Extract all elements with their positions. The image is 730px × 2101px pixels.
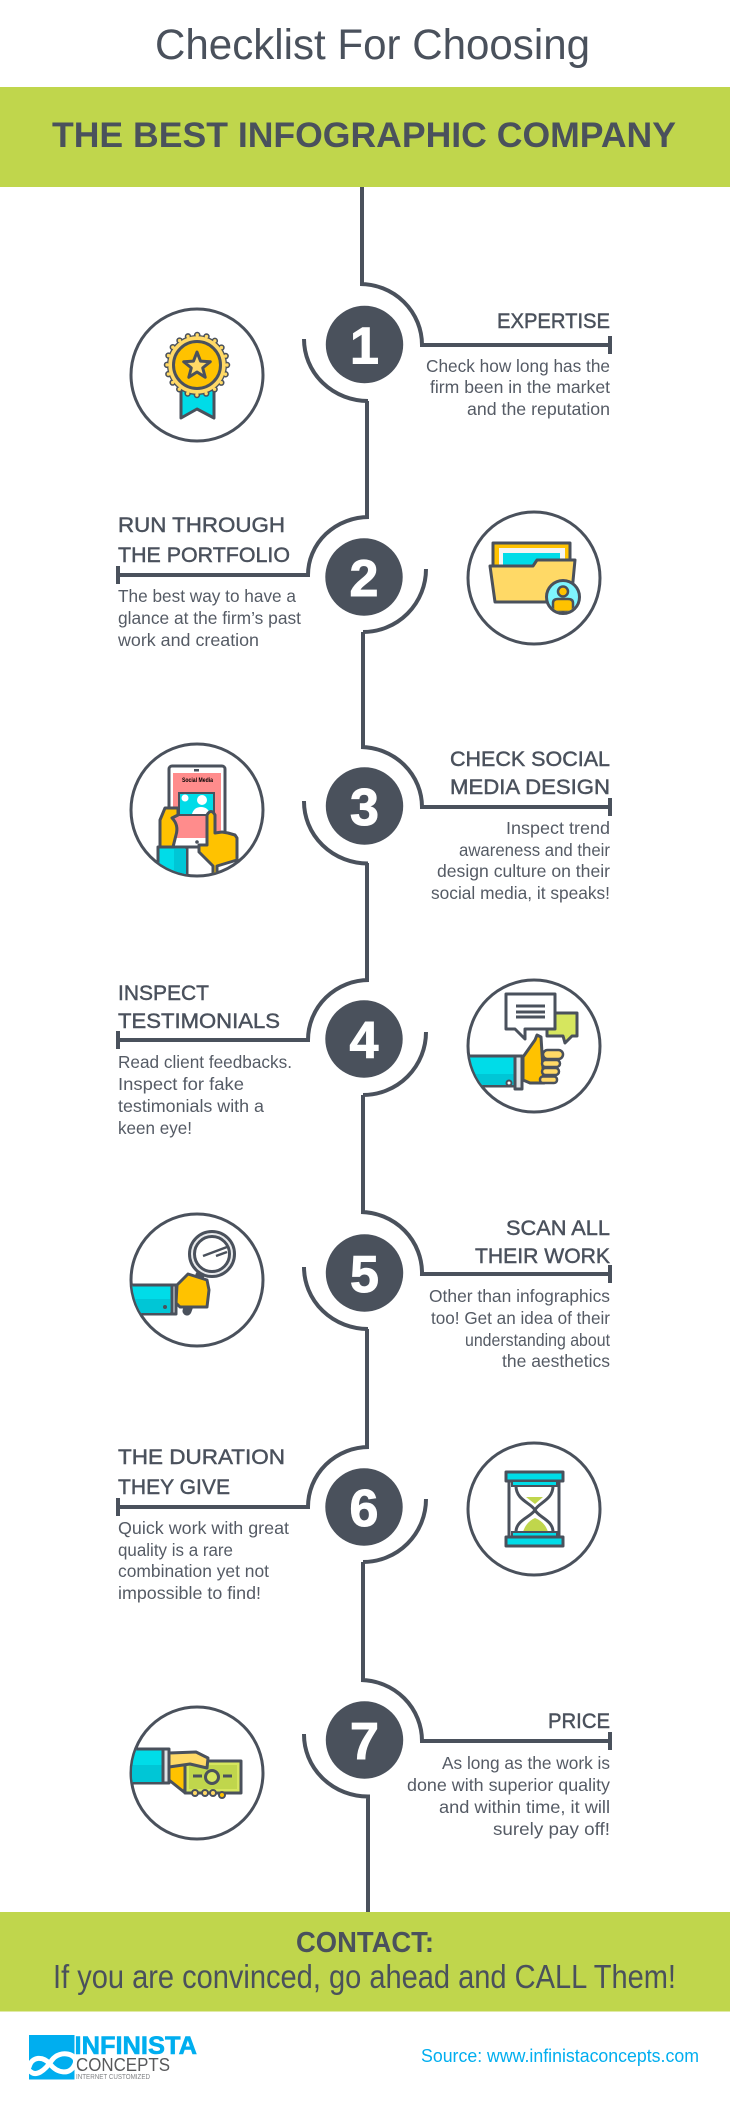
step 5: scan work	[304, 1095, 610, 1371]
step 4: testimonials: TESTIMONIALS	[118, 1010, 280, 1033]
step 3: social media: MEDIA DESIGN	[450, 776, 610, 799]
step 3: social media	[304, 632, 610, 903]
icon: medal	[131, 309, 263, 441]
step 4: testimonials: 4	[350, 1012, 379, 1070]
step 3: social media: Inspect trend	[506, 818, 610, 838]
icon: folder	[468, 512, 600, 644]
step 1: expertise: EXPERTISE	[497, 310, 610, 333]
step 1: expertise: firm been in the market	[430, 377, 610, 397]
step 6: duration: combination yet not	[118, 1561, 269, 1581]
step 6: duration: THE DURATION	[118, 1446, 285, 1469]
step 5: scan work: Other than infographics	[429, 1286, 610, 1306]
step 1: expertise: 1	[350, 318, 379, 376]
contact banner	[0, 1912, 730, 2012]
step 2: portfolio: The best way to have a	[118, 586, 296, 606]
header banner	[0, 87, 730, 187]
step 2: portfolio: work and creation	[117, 630, 259, 650]
step 7: price: PRICE	[548, 1710, 610, 1733]
logo: INTERNET CUSTOMIZED	[76, 2072, 150, 2081]
step 7: price	[304, 1562, 610, 1912]
step 5: scan work: THEIR WORK	[475, 1245, 610, 1268]
step 3: social media: CHECK SOCIAL	[450, 748, 610, 771]
step 1: expertise: and the reputation	[467, 399, 610, 419]
step 5: scan work: understanding about	[465, 1330, 610, 1350]
step 2: portfolio: RUN THROUGH	[118, 514, 285, 537]
step 4: testimonials	[118, 863, 426, 1138]
step 1: expertise	[304, 187, 610, 419]
icon: tablet with hands	[131, 744, 263, 877]
step 7: price: As long as the work is	[442, 1753, 610, 1773]
step 3: social media: design culture on their	[437, 861, 610, 881]
step 7: price: surely pay off!	[493, 1819, 610, 1839]
step 4: testimonials: testimonials with a	[118, 1096, 264, 1116]
logo: INFINISTA	[74, 2032, 197, 2060]
step 6: duration: THEY GIVE	[118, 1476, 230, 1499]
icon: magnifier in hand	[128, 1214, 263, 1346]
step 6: duration: quality is a rare	[118, 1540, 233, 1560]
step 4: testimonials: INSPECT	[118, 982, 209, 1005]
step 2: portfolio: THE PORTFOLIO	[118, 544, 290, 567]
step 7: price: and within time, it will	[439, 1797, 610, 1817]
step 6: duration	[118, 1329, 426, 1603]
step 3: social media: awareness and their	[459, 840, 610, 860]
source link: Source: www.infinistaconcepts.com	[421, 2045, 699, 2066]
step 4: testimonials: keen eye!	[118, 1118, 192, 1138]
step 7: price: 7	[350, 1713, 379, 1771]
icon: thumbs up with speech bubbles	[466, 980, 600, 1112]
step 2: portfolio: glance at the firm’s past	[118, 608, 301, 628]
step 6: duration: impossible to find!	[118, 1583, 261, 1603]
logo	[28, 2032, 197, 2081]
icon: hourglass	[468, 1443, 600, 1575]
step 5: scan work: 5	[350, 1246, 379, 1304]
step 5: scan work: SCAN ALL	[506, 1217, 610, 1240]
step 7: price: done with superior quality	[407, 1775, 610, 1795]
logo: CONCEPTS	[76, 2055, 170, 2075]
step 4: testimonials: Read client feedbacks.	[118, 1052, 292, 1072]
icon: tablet with hands: Social Media	[182, 778, 214, 784]
step 2: portfolio: 2	[350, 550, 378, 608]
step 2: portfolio	[117, 401, 426, 650]
step 3: social media: 3	[350, 779, 379, 837]
contact banner: CONTACT:	[296, 1927, 434, 1959]
title: Checklist For Choosing	[155, 21, 590, 69]
icon: hand with money	[128, 1707, 263, 1839]
header banner: THE BEST INFOGRAPHIC COMPANY	[52, 116, 676, 155]
step 3: social media: social media, it speaks!	[431, 883, 610, 903]
step 5: scan work: the aesthetics	[502, 1351, 610, 1371]
step 5: scan work: too! Get an idea of their	[431, 1308, 610, 1328]
step 1: expertise: Check how long has the	[426, 356, 610, 376]
step 6: duration: Quick work with great	[118, 1518, 289, 1538]
step 6: duration: 6	[350, 1480, 378, 1538]
step 4: testimonials: Inspect for fake	[118, 1074, 244, 1094]
